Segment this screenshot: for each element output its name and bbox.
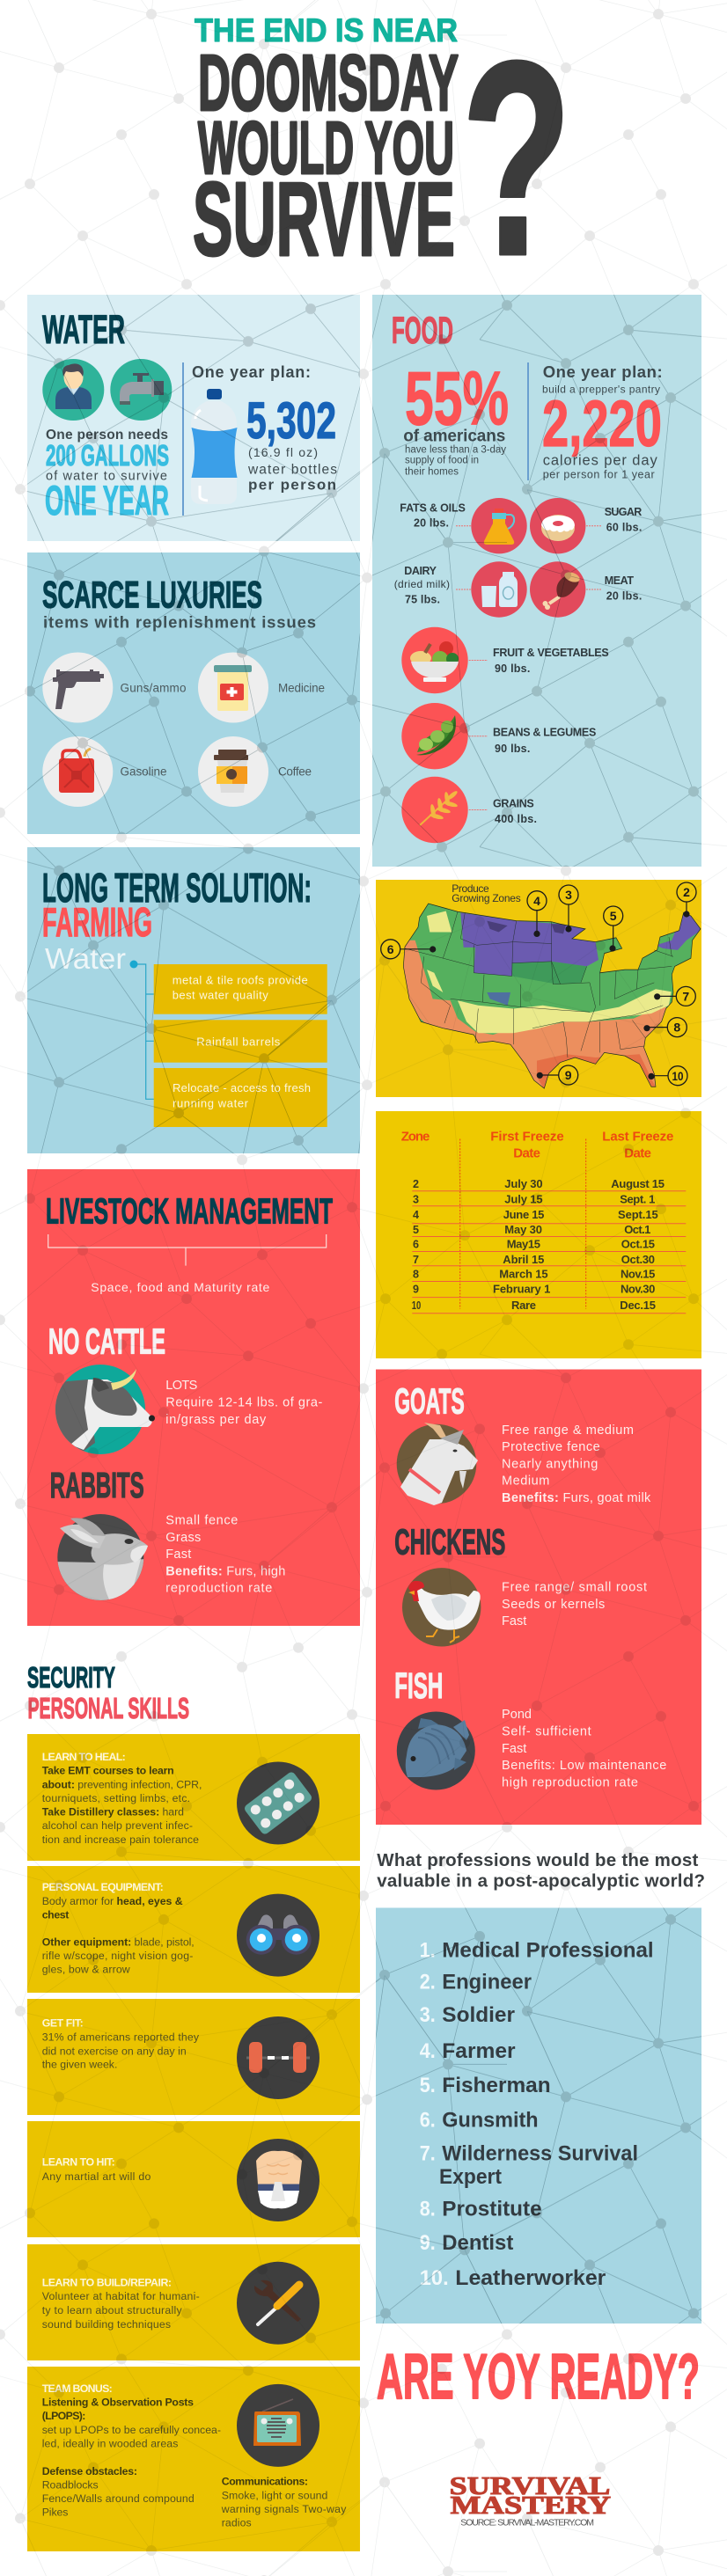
stat: 2,220 calories: calories per day	[543, 453, 657, 469]
text: defense obstacles: Defense obstacles:	[42, 2465, 137, 2477]
heading: no cattle: NO CATTLE	[48, 1321, 165, 1362]
item: coffee	[198, 736, 312, 807]
panel: learn to heal	[27, 1734, 360, 1861]
text: fish facts: high reproduction rate	[502, 1775, 638, 1789]
text: goat facts: Free range & medium	[502, 1423, 634, 1438]
text: goat facts	[502, 1423, 651, 1505]
title line: would you: WOULD YOU	[198, 106, 454, 189]
text: one person needs 200 gallons: One person needs	[46, 428, 168, 443]
text: personal equipment: chest	[42, 1908, 69, 1921]
zone markers: 2	[683, 885, 690, 899]
title line: doomsday: DOOMSDAY	[198, 40, 459, 128]
table rows: June 15	[503, 1208, 544, 1221]
list item 8: Prostitute	[442, 2198, 542, 2221]
text: chicken facts: Fast	[502, 1614, 526, 1628]
panel: long term solution	[27, 847, 360, 1153]
text: learn to build: ty to learn about structurally	[42, 2304, 183, 2316]
table rows: 10	[412, 1299, 421, 1312]
item: coffee: Coffee	[278, 765, 312, 779]
icon: wrench and screwdriver	[237, 2262, 319, 2345]
heading: scarce luxuries: SCARCE LUXURIES	[42, 574, 262, 616]
stat: 55 percent: have less than a 3-day	[405, 444, 506, 455]
text: one person needs 200 gallons: ONE YEAR	[45, 477, 169, 523]
stat: 55 percent: their homes	[405, 467, 459, 478]
map of the United States	[399, 898, 704, 1096]
text: chicken facts	[502, 1581, 647, 1628]
list item 2: Engineer	[442, 1970, 532, 1994]
list item 6: Gunsmith	[442, 2108, 539, 2133]
icon: martial artist torso	[237, 2139, 319, 2221]
big question mark: ?	[461, 4, 572, 313]
text: get fit	[42, 2017, 200, 2071]
box: relocate: running water	[173, 1096, 249, 1109]
text: get fit: GET FIT:	[42, 2017, 84, 2030]
text: communications: warning signals Two-way	[221, 2503, 347, 2515]
box: relocate	[154, 1068, 327, 1127]
stat: 2,220 calories: One year plan:	[543, 362, 663, 381]
icon: person	[42, 359, 104, 421]
table rows	[412, 1177, 665, 1312]
panel: freeze date table	[376, 1111, 701, 1358]
list item 4: Farmer	[442, 2039, 516, 2063]
list item 1: Medical Professional	[442, 1939, 654, 1963]
text: team bonus and lpops: set up LPOPs to be carefully concea-	[42, 2424, 221, 2436]
stat: 5,302 water bottles: water bottles	[247, 462, 337, 477]
text: learn to hit: LEARN TO HIT:	[42, 2156, 115, 2169]
text: communications: radios	[222, 2516, 252, 2528]
text: fish facts: Fast	[502, 1742, 526, 1756]
list item 1: 1.	[420, 1939, 436, 1963]
bracket	[48, 1234, 327, 1266]
text: goat facts: Benefits: Furs, goat milk	[502, 1491, 651, 1505]
panel: learn to build	[27, 2244, 360, 2360]
text: professions question: What professions would be the most	[377, 1850, 698, 1870]
text: learn to heal: about: preventing infection, CPR,	[42, 1778, 202, 1790]
table rows: Sept. 1	[620, 1192, 655, 1205]
icon: cow	[55, 1365, 155, 1454]
label: water: Water	[45, 942, 126, 975]
table headers: Date	[624, 1145, 651, 1161]
text: rabbit facts: Grass	[165, 1531, 201, 1545]
text: cattle facts: in/grass per day	[165, 1413, 267, 1427]
text: team bonus and lpops: TEAM BONUS:	[42, 2382, 113, 2395]
heading: fish: FISH	[394, 1665, 443, 1706]
text: cattle facts: LOTS	[165, 1379, 197, 1393]
zone markers	[381, 882, 696, 1086]
item: beans and legumes: 90 lbs.	[495, 743, 530, 755]
text: fish facts: Benefits: Low maintenance	[502, 1759, 666, 1773]
item: guns: Guns/ammo	[120, 682, 187, 695]
heading: farming: FARMING	[42, 899, 152, 945]
item: sugar: SUGAR	[605, 506, 642, 518]
table rows: Oct.15	[621, 1237, 655, 1250]
text: rabbit facts	[165, 1513, 285, 1596]
table rows: July 30	[504, 1177, 543, 1190]
item: grains: GRAINS	[493, 797, 534, 809]
heading: goats: GOATS	[394, 1381, 465, 1422]
subheading: items with replenishment issues	[43, 612, 316, 632]
list item 5: 5.	[420, 2074, 436, 2097]
text: team bonus and lpops: led, ideally in wooded areas	[42, 2437, 178, 2449]
title block	[193, 4, 572, 313]
list item 5: Fisherman	[442, 2074, 551, 2097]
heading: security personal skills: SECURITY	[27, 1661, 115, 1694]
table rows: 4	[413, 1208, 420, 1221]
zone markers: 10	[672, 1069, 684, 1083]
table headers: First Freeze	[490, 1129, 564, 1144]
zone markers: 4	[533, 894, 540, 908]
item: grains	[401, 777, 537, 843]
text: get fit: did not exercise on any day in	[42, 2045, 187, 2057]
stat: 5,302 water bottles: 5,302	[246, 392, 336, 450]
text: goat facts: Medium	[502, 1475, 549, 1489]
table headers	[401, 1129, 673, 1161]
table rows: Nov.15	[621, 1267, 655, 1280]
item: dairy: 75 lbs.	[405, 594, 440, 606]
text: cattle facts: Require 12-14 lbs. of gra-	[165, 1396, 322, 1410]
list item 9: Dentist	[442, 2231, 513, 2255]
text: rabbit facts: Small fence	[165, 1513, 238, 1527]
text: learn to hit: Any martial art will do	[42, 2170, 151, 2183]
zone markers: 8	[673, 1021, 680, 1035]
text: fish facts	[502, 1708, 666, 1789]
table rows: May 30	[504, 1223, 542, 1236]
item: medicine	[198, 653, 325, 723]
table rows: Sept.15	[618, 1208, 658, 1221]
table rows: May15	[507, 1237, 540, 1250]
table rows: Oct.1	[624, 1223, 650, 1236]
text: rabbit facts: Fast	[165, 1548, 191, 1562]
stat: 2,220 calories: per person for 1 year	[543, 468, 655, 480]
text: rabbit facts: reproduction rate	[165, 1582, 272, 1596]
panel: water	[27, 295, 360, 541]
table rows: 5	[413, 1223, 419, 1236]
table rows: July 15	[504, 1192, 543, 1205]
panel: livestock management	[27, 1169, 360, 1626]
text: learn to build: Volunteer at habitat for humani-	[42, 2290, 200, 2302]
text: one person needs 200 gallons	[45, 428, 169, 523]
text: one year plan: One year plan:	[192, 363, 311, 381]
heading: long term solution: LONG TERM SOLUTION:	[42, 865, 312, 911]
list item 6: 6.	[420, 2108, 436, 2133]
item: meat: 20 lbs.	[606, 589, 642, 602]
icon: chicken	[402, 1568, 481, 1647]
text: defense obstacles: Roadblocks	[42, 2478, 99, 2491]
logo: survival mastery: SURVIVAL	[450, 2473, 610, 2500]
logo: survival mastery: MASTERY	[451, 2492, 611, 2520]
panel: goats chickens fish	[376, 1369, 701, 1825]
connector bracket	[134, 964, 154, 1099]
item: grains: 400 lbs.	[495, 813, 537, 825]
panel: scarce luxuries	[27, 553, 360, 834]
title line: survive: SURVIVE	[193, 161, 455, 278]
text: learn to build: LEARN TO BUILD/REPAIR:	[42, 2276, 172, 2288]
text: communications	[221, 2476, 347, 2528]
text: learn to heal: alcohol can help prevent infec-	[42, 1819, 193, 1832]
heading: rabbits: RABBITS	[50, 1465, 144, 1505]
panel: professions list	[376, 1907, 701, 2324]
table rows: 7	[413, 1253, 419, 1266]
text: learn to hit	[42, 2156, 151, 2183]
text: get fit: the given week.	[42, 2059, 117, 2071]
icon: goat	[397, 1423, 478, 1505]
list item 7: Wilderness Survival	[442, 2142, 638, 2166]
map title	[452, 882, 521, 904]
list item 7	[420, 2142, 638, 2189]
icon: radio	[237, 2384, 319, 2467]
list item 2: 2.	[420, 1970, 436, 1994]
item: fats and oils: 20 lbs.	[414, 517, 449, 530]
item: fruit and vegetables: FRUIT & VEGETABLES	[493, 647, 609, 659]
text: space food maturity: Space, food and Maturity rate	[91, 1280, 270, 1294]
zone markers: 5	[610, 909, 617, 923]
map title: Growing Zones	[452, 892, 521, 904]
list item 3: Soldier	[442, 2003, 515, 2027]
table rows: Rare	[511, 1299, 536, 1312]
text: communications: Smoke, light or sound	[222, 2489, 328, 2501]
item: beans and legumes: BEANS & LEGUMES	[493, 727, 596, 739]
table rows: 8	[413, 1267, 419, 1280]
heading: food: FOOD	[392, 310, 453, 352]
item: fats and oils: FATS & OILS	[400, 502, 466, 515]
box: barrels	[154, 1020, 327, 1063]
item: gasoline: Gasoline	[120, 765, 167, 779]
list item 7: Expert	[439, 2165, 502, 2189]
item: fruit and vegetables	[401, 627, 609, 693]
stat: 5,302 water bottles: per person	[248, 477, 336, 494]
zone markers: 6	[387, 942, 394, 956]
item: guns	[42, 653, 187, 723]
text: personal equipment: gles, bow & arrow	[42, 1964, 130, 1976]
list item 10: Leatherworker	[455, 2266, 606, 2290]
icon: fish	[397, 1712, 475, 1789]
box: barrels: Rainfall barrels	[196, 1036, 281, 1049]
panel: personal equipment	[27, 1866, 360, 1993]
text: learn to build: sound building techniques	[42, 2318, 171, 2331]
icon: dumbbell	[237, 2016, 319, 2099]
list item 8: 8.	[420, 2198, 436, 2221]
source line: SOURCE: SURVIVAL-MASTERY.COM	[460, 2518, 594, 2528]
stat: 55 percent	[403, 356, 509, 478]
item: meat: MEAT	[605, 574, 634, 587]
map title: Produce	[452, 882, 489, 895]
item: beans and legumes	[401, 703, 596, 769]
text: team bonus and lpops: (LPOPS):	[42, 2410, 85, 2422]
text: one person needs 200 gallons: 200 GALLONS	[46, 439, 169, 472]
stat: 55 percent: 55%	[405, 356, 509, 441]
stat: 2,220 calories: 2,220	[542, 387, 662, 460]
list item 4: 4.	[420, 2039, 436, 2063]
text: learn to heal: tion and increase pain tolerance	[42, 1833, 199, 1846]
kicker: the end is near: THE END IS NEAR	[195, 12, 458, 48]
text: professions question	[377, 1850, 705, 1891]
table rows: Nov.30	[621, 1282, 655, 1295]
text: communications: Communications:	[222, 2476, 308, 2488]
text: learn to build	[42, 2276, 200, 2331]
box: roofs: metal & tile roofs provide	[173, 973, 308, 986]
item: fats and oils	[400, 498, 527, 553]
list item 9: 9.	[420, 2231, 436, 2255]
icon: water tap	[110, 359, 172, 421]
text: learn to heal: Take Distillery classes: hard	[42, 1805, 184, 1818]
zone markers: 3	[565, 888, 572, 902]
table rows: August 15	[611, 1177, 665, 1190]
table rows: Dec.15	[620, 1299, 656, 1312]
box: roofs	[154, 964, 327, 1014]
text: get fit: 31% of americans reported they	[42, 2031, 200, 2044]
text: learn to heal: LEARN TO HEAL:	[42, 1751, 126, 1763]
item: medicine: Medicine	[278, 682, 325, 695]
text: chicken facts: Free range/ small roost	[502, 1581, 647, 1595]
text: goat facts: Nearly anything	[502, 1458, 598, 1472]
text: personal equipment: PERSONAL EQUIPMENT:	[42, 1881, 164, 1893]
stat: 55 percent: of americans	[403, 428, 505, 446]
zone markers: 7	[682, 989, 689, 1003]
text: personal equipment: rifle w/scope, night vision gog-	[42, 1950, 193, 1962]
table rows: 6	[413, 1237, 419, 1250]
heading: livestock management: LIVESTOCK MANAGEMENT	[46, 1191, 333, 1232]
text: personal equipment: Other equipment: blade, pistol,	[42, 1936, 195, 1948]
panel: team bonus	[27, 2367, 360, 2551]
panel: learn to hit	[27, 2121, 360, 2237]
box: relocate: Relocate - access to fresh	[173, 1081, 311, 1094]
box: roofs: best water quality	[173, 989, 268, 1002]
table rows: 9	[413, 1282, 419, 1295]
item: dairy	[394, 561, 527, 618]
text: fish facts: Pond	[502, 1708, 532, 1722]
panel: get fit	[27, 1999, 360, 2115]
text: personal equipment	[42, 1881, 195, 1976]
stat: 2,220 calories	[542, 362, 663, 480]
text: defense obstacles: Fence/Walls around compound	[42, 2492, 195, 2505]
text: one person needs 200 gallons: of water to survive	[46, 470, 167, 484]
table headers: Zone	[401, 1129, 430, 1144]
item: fruit and vegetables: 90 lbs.	[495, 662, 530, 675]
logo: survival mastery	[450, 2473, 611, 2520]
icon: binoculars	[237, 1894, 319, 1977]
text: personal equipment: Body armor for head, eyes &	[42, 1895, 183, 1907]
table rows: 3	[413, 1192, 419, 1205]
table headers: Last Freeze	[602, 1129, 673, 1144]
table rows: 2	[413, 1177, 419, 1190]
list item 7: 7.	[420, 2142, 436, 2166]
table rows: Oct.30	[621, 1253, 655, 1266]
list item 3: 3.	[420, 2003, 436, 2027]
text: rabbit facts: Benefits: Furs, high	[165, 1564, 285, 1578]
text: team bonus and lpops: Listening & Observation Posts	[42, 2397, 194, 2409]
text: chicken facts: Seeds or kernels	[502, 1598, 605, 1612]
item: sugar	[530, 498, 642, 553]
text: defense obstacles	[42, 2465, 195, 2519]
item: dairy: (dried milk)	[394, 578, 450, 590]
item: meat	[530, 561, 642, 618]
icon: pills	[237, 1761, 319, 1844]
icon: water bottle	[191, 389, 238, 504]
text: team bonus and lpops	[42, 2382, 221, 2449]
stat: 5,302 water bottles: (16.9 fl oz)	[248, 445, 318, 459]
heading: water: WATER	[42, 307, 125, 352]
text: professions question: valuable in a post-apocalyptic world?	[377, 1870, 705, 1891]
stat: 55 percent: supply of food in	[405, 456, 479, 466]
heading: security personal skills	[27, 1661, 189, 1724]
heading: security personal skills: PERSONAL SKILLS	[28, 1692, 189, 1724]
table rows: March 15	[499, 1267, 548, 1280]
text: fish facts: Self- sufficient	[502, 1724, 591, 1738]
item: dairy: DAIRY	[404, 565, 437, 577]
list item 10: 10.	[420, 2266, 449, 2290]
zone markers: 9	[565, 1068, 572, 1082]
text: cattle facts	[165, 1379, 322, 1427]
table rows: February 1	[493, 1282, 550, 1295]
text: learn to heal: Take EMT courses to learn	[42, 1765, 174, 1777]
panel: food	[372, 295, 701, 867]
text: learn to heal	[42, 1751, 202, 1846]
text: defense obstacles: Pikes	[42, 2506, 68, 2519]
text: goat facts: Protective fence	[502, 1440, 600, 1454]
item: gasoline	[42, 736, 167, 807]
icon: rabbit	[57, 1514, 148, 1600]
heading: chickens: CHICKENS	[394, 1522, 505, 1562]
panel: growing zones map	[376, 880, 704, 1097]
stat: 2,220 calories: build a prepper's pantry	[542, 384, 660, 396]
text: learn to heal: tourniquets, setting limbs, etc.	[42, 1792, 190, 1804]
table headers: Date	[513, 1145, 540, 1161]
table rows: Abril 15	[503, 1253, 544, 1266]
stat: 5,302 water bottles	[246, 392, 337, 494]
item: sugar: 60 lbs.	[606, 522, 642, 534]
